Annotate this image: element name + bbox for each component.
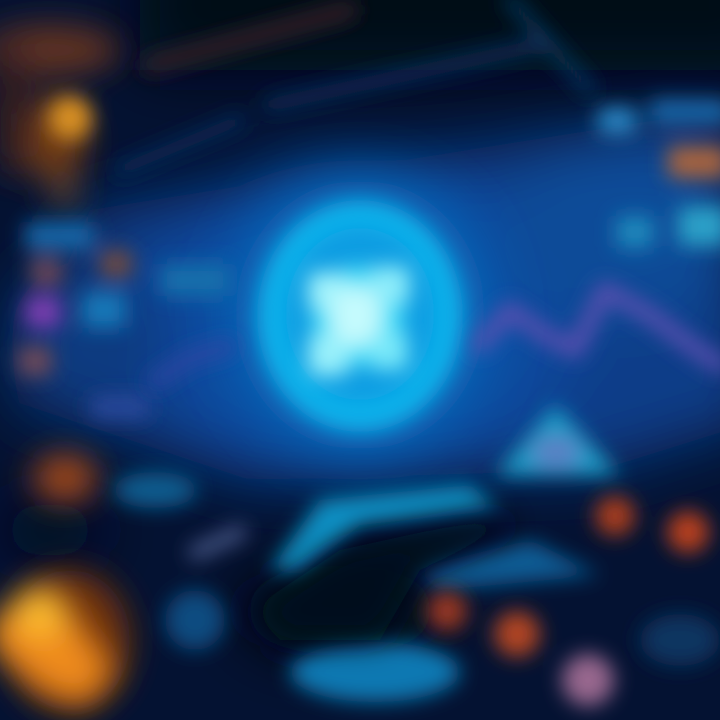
left data blocks (18, 222, 230, 418)
central ring glow (235, 180, 485, 450)
bottom left orange glow (10, 454, 130, 710)
icon: bottom left bright lamp (0, 585, 115, 705)
central ring inner disc (286, 228, 434, 400)
icon: left orange light (48, 96, 92, 140)
bottom cyan streaks (113, 472, 720, 702)
left purple trend line (150, 345, 235, 385)
left orange column (0, 24, 120, 211)
right purple line chart (480, 290, 720, 365)
right top data blocks (598, 100, 720, 248)
bottom red indicator lights (427, 496, 709, 706)
icon: glowing X (308, 266, 410, 376)
bottom dark hand silhouette (250, 515, 520, 640)
right triangle icon (495, 405, 620, 475)
background: central blue panel glow (10, 110, 720, 480)
top diagonal beams (120, 0, 590, 170)
central cyan ring (257, 200, 463, 432)
